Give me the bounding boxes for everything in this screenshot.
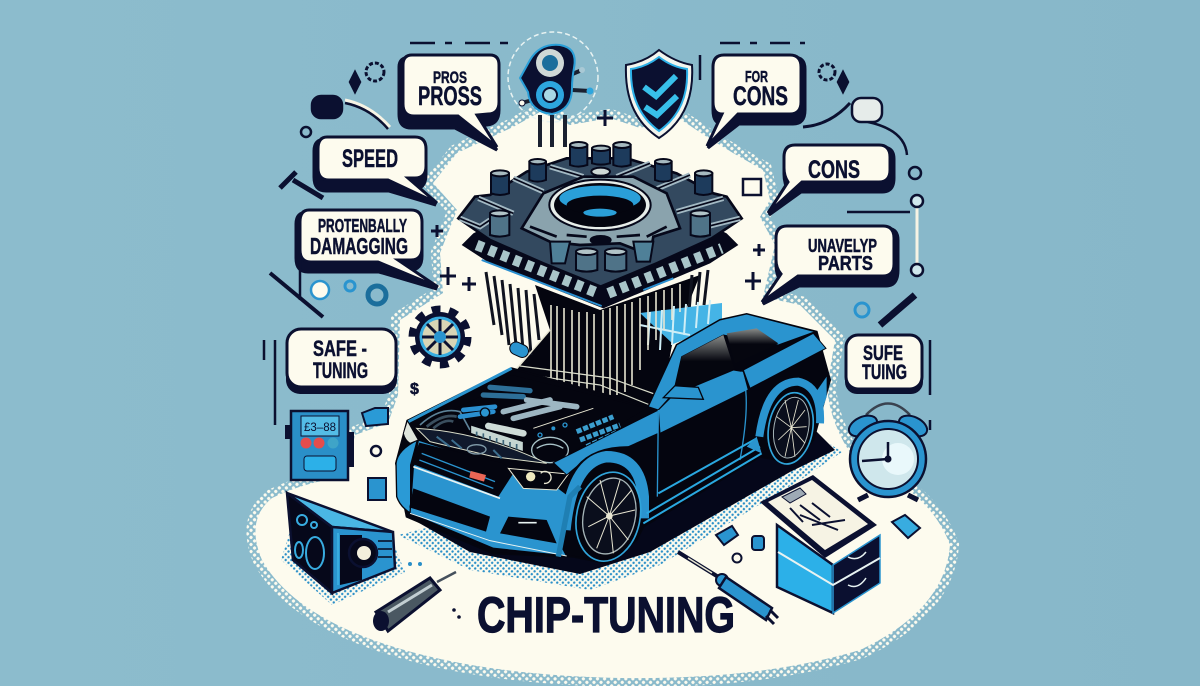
icon: blue block bbox=[368, 478, 386, 500]
dots bbox=[408, 562, 461, 619]
icon: usb stick bbox=[880, 295, 915, 325]
icon: processor node bbox=[508, 32, 598, 147]
icon: shield with check bbox=[626, 50, 692, 138]
bubble: cons bbox=[768, 145, 894, 215]
circuit line bbox=[847, 211, 910, 213]
icon: soldering tool right bbox=[678, 552, 778, 624]
icon: plug left bbox=[345, 100, 390, 127]
icon: dollar sign: $ bbox=[410, 381, 419, 398]
icon: rod bbox=[916, 203, 918, 270]
chip top plate bbox=[458, 158, 742, 287]
icon: gear bbox=[413, 310, 467, 364]
label: sufe tuing: TUING bbox=[862, 361, 907, 384]
icon: control meter bbox=[285, 411, 354, 480]
icon: tool tube left bbox=[373, 572, 456, 631]
icon: cabinet with clipboard bbox=[760, 475, 880, 613]
icon: plus signs bbox=[431, 110, 765, 291]
label: safe tuning: SAFE - bbox=[313, 336, 367, 361]
upper left decorations bbox=[264, 43, 508, 425]
bubble: potentially damaging: DAMAGGING bbox=[310, 233, 408, 259]
hood knob bbox=[508, 340, 531, 360]
cream burst backdrop bbox=[255, 112, 950, 678]
car body silhouette bbox=[396, 314, 830, 563]
hood lip bbox=[408, 368, 547, 463]
icon: gear small right bbox=[819, 64, 835, 80]
bubble: for cons: CONS bbox=[733, 81, 788, 111]
icon: gear small blue bbox=[368, 286, 386, 304]
icon: small ring bbox=[345, 281, 355, 291]
chip center gear bbox=[522, 177, 680, 255]
bubble: cons: CONS bbox=[808, 156, 860, 184]
halftone shadow under speaker bbox=[281, 525, 405, 605]
icon: ring left bbox=[301, 127, 311, 137]
icon: diamond right bbox=[838, 72, 848, 92]
icon: plug right bbox=[803, 103, 850, 127]
chip base bbox=[462, 170, 738, 308]
windows bbox=[673, 335, 734, 393]
central chip bbox=[458, 142, 742, 308]
icon: ring bbox=[371, 446, 381, 456]
car bbox=[396, 314, 830, 567]
dash row bbox=[264, 43, 508, 425]
bubble: unavailable parts: UNAVELYP bbox=[808, 236, 877, 256]
icon: diamond left bbox=[350, 72, 360, 92]
bubble: pros bbox=[399, 55, 499, 150]
door panels bbox=[658, 370, 748, 433]
bubble: for cons: FOR bbox=[745, 69, 768, 86]
icon: small chart block bbox=[362, 408, 388, 426]
label: sufe tuing bbox=[845, 335, 923, 394]
fender and front wheel arch bbox=[553, 410, 658, 557]
chip center ring bbox=[549, 180, 651, 230]
bubble: for cons bbox=[707, 55, 805, 148]
side sills bbox=[643, 438, 762, 523]
dash row bbox=[700, 43, 930, 430]
bubble: speed: SPEED bbox=[342, 145, 398, 173]
bubble: unavailable parts bbox=[762, 226, 898, 304]
red badge bbox=[469, 471, 486, 482]
icon: alarm clock bbox=[846, 404, 930, 500]
front bumper and grille bbox=[396, 421, 570, 556]
engine bay bbox=[420, 375, 647, 463]
icon: ring right bbox=[909, 167, 921, 179]
chip posts bbox=[490, 142, 712, 272]
label: safe tuning: TUNING bbox=[313, 358, 368, 383]
icon: small gear left bbox=[366, 63, 384, 81]
title: CHIP-TUNING bbox=[477, 587, 735, 643]
icon: rod ends bbox=[911, 195, 923, 207]
clipboard bbox=[760, 475, 877, 558]
icon: speaker cube bbox=[287, 493, 395, 593]
side mirror bbox=[663, 386, 703, 399]
chip rays over open hood bbox=[486, 270, 722, 410]
bubble: potentially damaging bbox=[296, 210, 438, 289]
bubble: pros: PROSS bbox=[418, 81, 482, 111]
front wheel bbox=[568, 466, 649, 567]
chip outer ridges bbox=[460, 163, 740, 227]
bubble: pros: PROS bbox=[433, 68, 467, 87]
bubble: speed bbox=[314, 137, 437, 205]
car shadow bbox=[398, 425, 842, 590]
label: safe tuning bbox=[286, 329, 397, 394]
upper right decorations bbox=[700, 43, 930, 430]
icon: hammer bbox=[280, 172, 323, 198]
icon: small parts bbox=[716, 515, 920, 562]
icon: rod end lower bbox=[911, 264, 923, 276]
bubble: potentially damaging: PROTENBALLY bbox=[318, 216, 407, 236]
rear wheel bbox=[759, 382, 820, 468]
bubble: unavailable parts: PARTS bbox=[818, 253, 873, 275]
cabinet bbox=[777, 525, 833, 613]
icon: control meter: £3–88 bbox=[304, 420, 336, 434]
upper body and roof bbox=[643, 314, 827, 523]
icon: small square bbox=[743, 179, 761, 195]
icon: small bubble bbox=[311, 281, 329, 299]
icon: pencil tool bbox=[270, 273, 323, 317]
icon: ring blue bbox=[855, 303, 869, 317]
headlight bbox=[508, 468, 568, 490]
label: sufe tuing: SUFE bbox=[863, 342, 903, 365]
